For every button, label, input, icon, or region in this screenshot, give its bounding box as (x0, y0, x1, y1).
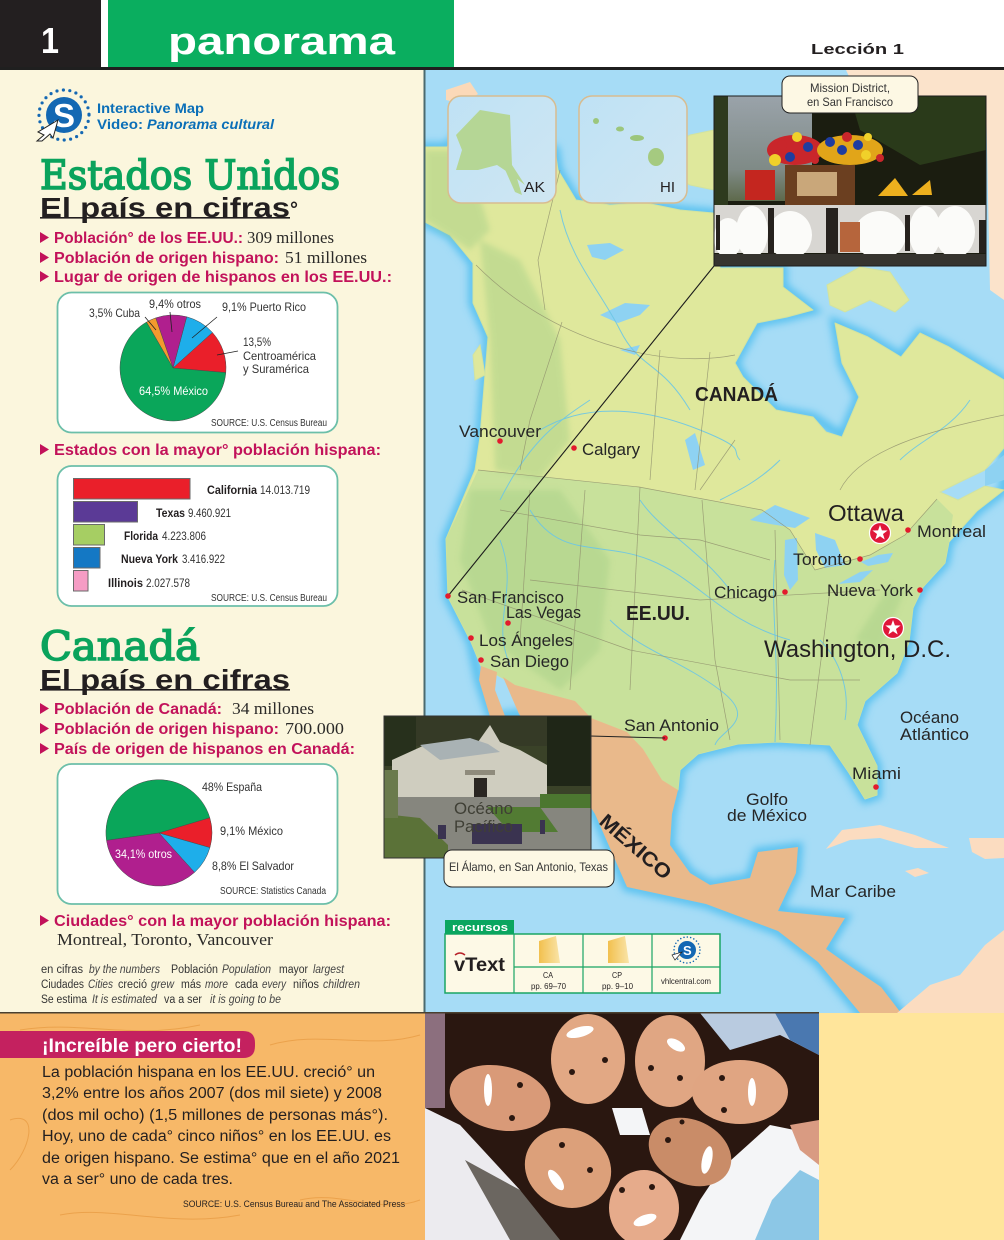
fact list: Estados Unidos: 309 millones (247, 228, 334, 247)
Miami: Miami (852, 764, 901, 783)
icon: CP workbook (608, 936, 629, 963)
San Francisco: San Francisco (457, 588, 564, 607)
bar chart: states: 4.223.806 (162, 529, 206, 543)
Las Vegas: Las Vegas (506, 603, 581, 622)
leader line: San Francisco (448, 266, 714, 596)
recursos resource table: CP (612, 970, 622, 980)
banner (0, 1031, 255, 1058)
chart: origin of Hispanics in the US: Centroamérica (243, 349, 316, 363)
yellow panel, lower right (819, 1013, 1004, 1240)
Atlantic Ocean: Océano (900, 708, 959, 727)
bar chart: states: Nueva York (121, 552, 178, 566)
San Antonio: San Antonio (624, 716, 719, 735)
recursos resource table: pp. 9–10 (602, 981, 633, 991)
fact list: Estados Unidos (40, 228, 392, 286)
Gulf of Mexico (727, 790, 807, 825)
Greenland and far-north land (846, 70, 1004, 300)
caption: El Álamo (444, 850, 614, 887)
inset map: Hawaii: HI (660, 179, 675, 196)
inset map: Alaska: AK (524, 179, 545, 196)
glossary: largest (313, 964, 345, 976)
Arctic islands (473, 130, 909, 380)
mountains (425, 150, 905, 690)
body text: Hoy, uno de cada° cinco niños° en los EE.UU. es (42, 1128, 391, 1145)
province and state borders (462, 170, 1004, 745)
caption: Mission District: en San Francisco (807, 95, 893, 109)
glossary: It is estimated (92, 994, 158, 1006)
glossary: cada (235, 979, 259, 991)
heading: Estados Unidos: Estados Unidos (40, 153, 340, 199)
fact list: Estados Unidos: Población de origen hispano: (54, 250, 279, 267)
chart: origin of Hispanics in Canada (58, 764, 338, 904)
photo: El Álamo (384, 716, 591, 858)
body text: 3,2% entre los años 2007 (dos mil siete) y 2008 (42, 1085, 382, 1102)
vText logo: vText (454, 955, 506, 976)
chart: origin of Hispanics in the US: y Suramérica (243, 362, 309, 376)
body text: (dos mil ocho) (1,5 millones de personas más°). (42, 1107, 388, 1124)
rivers (500, 210, 970, 745)
glossary: Ciudades (41, 979, 84, 991)
chapter number: 1 (41, 20, 59, 61)
icon: supersite: S (683, 943, 692, 958)
Gulf of Mexico: Golfo (746, 790, 788, 809)
bar chart: states: 2.027.578 (146, 576, 190, 590)
EE.UU. label: EE.UU. (626, 603, 690, 625)
body text: va a ser° uno de cada tres. (42, 1171, 233, 1188)
panel: Increíble pero cierto: ¡Increíble pero cierto! (42, 1036, 242, 1057)
photo frame: El Álamo (384, 716, 591, 858)
glossary: más (181, 979, 201, 991)
lesson label: Lección 1 (811, 41, 904, 58)
bar chart: states: 14.013.719 (260, 483, 310, 497)
land: United States tint (446, 470, 953, 799)
land: Canada and United States (425, 120, 1004, 799)
chart: origin of Hispanics in Canada: 48% España (202, 780, 262, 794)
glossary: creció (118, 979, 147, 991)
Caribbean Sea: Mar Caribe (810, 882, 896, 901)
icon: CA workbook (539, 936, 560, 963)
fact list: Canadá: País de origen de hispanos en Canadá: (54, 741, 355, 758)
recursos resource table: CA (543, 970, 553, 980)
San Diego: San Diego (490, 652, 569, 671)
source: SOURCE: U.S. Census Bureau and The Associated Press (183, 1199, 405, 1210)
body text: La población hispana en los EE.UU. creció° un (42, 1064, 375, 1081)
cities with largest Hispanic population (40, 913, 391, 949)
body text (42, 1064, 400, 1188)
online resources label: Interactive Map (97, 100, 204, 116)
glossary: it is going to be (210, 994, 281, 1006)
photo: El Álamo: Océano (454, 799, 513, 818)
panel: Increíble pero cierto (0, 1013, 425, 1240)
chart: origin of Hispanics in the US: 64,5% México (139, 384, 208, 398)
Ottawa capital: Ottawa (828, 500, 904, 526)
glossary: Se estima (41, 994, 88, 1006)
recursos resource table: pp. 69–70 (531, 981, 566, 991)
photo: group of smiling friends (425, 1013, 819, 1240)
recursos resource table: vhlcentral.com (661, 976, 711, 986)
chart: origin of Hispanics in the US: 13,5% (243, 335, 271, 349)
fact list: Canadá: Población de Canadá: (54, 701, 222, 718)
glossary: children (323, 979, 360, 991)
bar chart: states (58, 466, 338, 606)
recursos resource table (445, 920, 720, 993)
fact list: Estados Unidos: 51 millones (285, 248, 367, 267)
caption: El Álamo: El Álamo, en San Antonio, Texas (449, 859, 608, 874)
bar chart: states: 9.460.921 (188, 506, 231, 520)
Montreal: Montreal (917, 522, 986, 541)
Canada label: CANADÁ (695, 383, 778, 406)
glossary: Población (171, 964, 218, 976)
chart: origin of Hispanics in the US: 3,5% Cuba (89, 306, 140, 320)
chart: origin of Hispanics in the US: 9,4% otros (149, 297, 201, 311)
fact list: Canadá: Población de origen hispano: (54, 721, 279, 738)
subheading: El país en cifras: El país en cifras (40, 192, 290, 223)
Ottawa capital (828, 500, 904, 544)
icon: supersite (672, 937, 700, 963)
glossary: va a ser (164, 994, 202, 1006)
online resources label: Video: (97, 116, 143, 132)
Miami (852, 764, 901, 790)
bar chart: states: Illinois (108, 576, 143, 590)
fact list: Canadá: 700.000 (285, 719, 344, 738)
Mexico label: MÉXICO (595, 809, 676, 885)
glossary: mayor (279, 964, 308, 976)
coast glow (425, 120, 1004, 1013)
section title: panorama (168, 21, 396, 63)
photo frame: Mission District (714, 96, 986, 266)
Washington capital (764, 618, 951, 663)
fact list: Estados Unidos: Población° de los EE.UU.: (54, 230, 243, 247)
glossary: Cities (88, 979, 113, 991)
chart: origin of Hispanics in Canada: SOURCE: Statistics Canada (220, 886, 326, 897)
bar chart: states: SOURCE: U.S. Census Bureau (211, 593, 327, 604)
divider line above bottom band (0, 1012, 819, 1014)
chart: origin of Hispanics in the US: SOURCE: U.S. Census Bureau (211, 418, 327, 429)
chart: origin of Hispanics in the US (58, 292, 338, 432)
chart: origin of Hispanics in Canada: 8,8% El Salvador (212, 859, 294, 873)
fact list: Canadá (40, 699, 355, 758)
panel: map of North America (425, 70, 1004, 1013)
glossary: by the numbers (89, 964, 160, 976)
left cream panel background (0, 70, 425, 1013)
photo: Mission District parade (714, 96, 986, 266)
glossary: every (262, 979, 287, 991)
Toronto: Toronto (793, 550, 852, 569)
Caribbean islands and South America (826, 825, 1004, 1013)
chart: origin of Hispanics in the US: 9,1% Puerto Rico (222, 300, 306, 314)
glossary: more (205, 979, 228, 991)
heading: Canadá: Canadá (40, 624, 200, 670)
bar chart: states: 3.416.922 (182, 552, 225, 566)
glossary: Population (222, 964, 271, 976)
cities with largest Hispanic population: Montreal, Toronto, Vancouver (57, 930, 273, 949)
bar chart: states: Texas (156, 506, 185, 520)
heading: states with largest Hispanic population: Estados con la mayor° población hispana: (54, 442, 381, 459)
San Antonio (590, 716, 719, 741)
Washington capital: Washington, D.C. (764, 636, 951, 663)
online resources label (97, 100, 275, 132)
Atlantic Ocean (900, 708, 969, 744)
caption: Mission District (782, 76, 918, 113)
subheading: El país en cifras: ° (290, 199, 298, 221)
city labels and markers (445, 383, 986, 901)
cities with largest Hispanic population: Ciudades° con la mayor población hispana: (54, 913, 391, 930)
Gulf of Mexico: de México (727, 806, 807, 825)
bar chart: states: Florida (124, 529, 158, 543)
Mexico (479, 666, 901, 1013)
inset map: Alaska (448, 96, 556, 203)
glossary: en cifras (41, 964, 83, 976)
inset map: Hawaii (579, 96, 687, 203)
online resources label: Panorama cultural (147, 116, 275, 132)
glossary: niños (293, 979, 319, 991)
chart: origin of Hispanics in Canada: 9,1% México (220, 824, 283, 838)
Los Angeles: Los Ángeles (479, 631, 573, 650)
fact list: Canadá: 34 millones (232, 699, 314, 718)
icon: supersite S cursor (37, 90, 89, 141)
photo: El Álamo: Pacífico (454, 817, 513, 836)
map border left (424, 70, 426, 1013)
lakes (587, 243, 1004, 590)
subheading: El país en cifras, Canadá: El país en cifras (40, 664, 290, 695)
glossary: grew (151, 979, 175, 991)
recursos resource table: recursos (452, 922, 508, 934)
Atlantic Ocean: Atlántico (900, 725, 969, 744)
header band (0, 0, 1004, 70)
body text: de origen hispano. Se estima° que en el año 2021 (42, 1150, 400, 1167)
caption: Mission District: Mission District, (810, 81, 890, 95)
Vancouver: Vancouver (459, 422, 541, 441)
Chicago: Chicago (714, 583, 777, 602)
pie slices (120, 315, 226, 421)
icon: supersite S cursor: S (53, 97, 75, 134)
chart: origin of Hispanics in Canada: 34,1% otros (115, 847, 172, 861)
Calgary: Calgary (582, 440, 640, 459)
glossary (41, 964, 360, 1006)
Nueva York: Nueva York (827, 581, 913, 600)
bar chart: states: California (207, 483, 257, 497)
fact list: Estados Unidos: Lugar de origen de hispanos en los EE.UU.: (54, 269, 392, 286)
